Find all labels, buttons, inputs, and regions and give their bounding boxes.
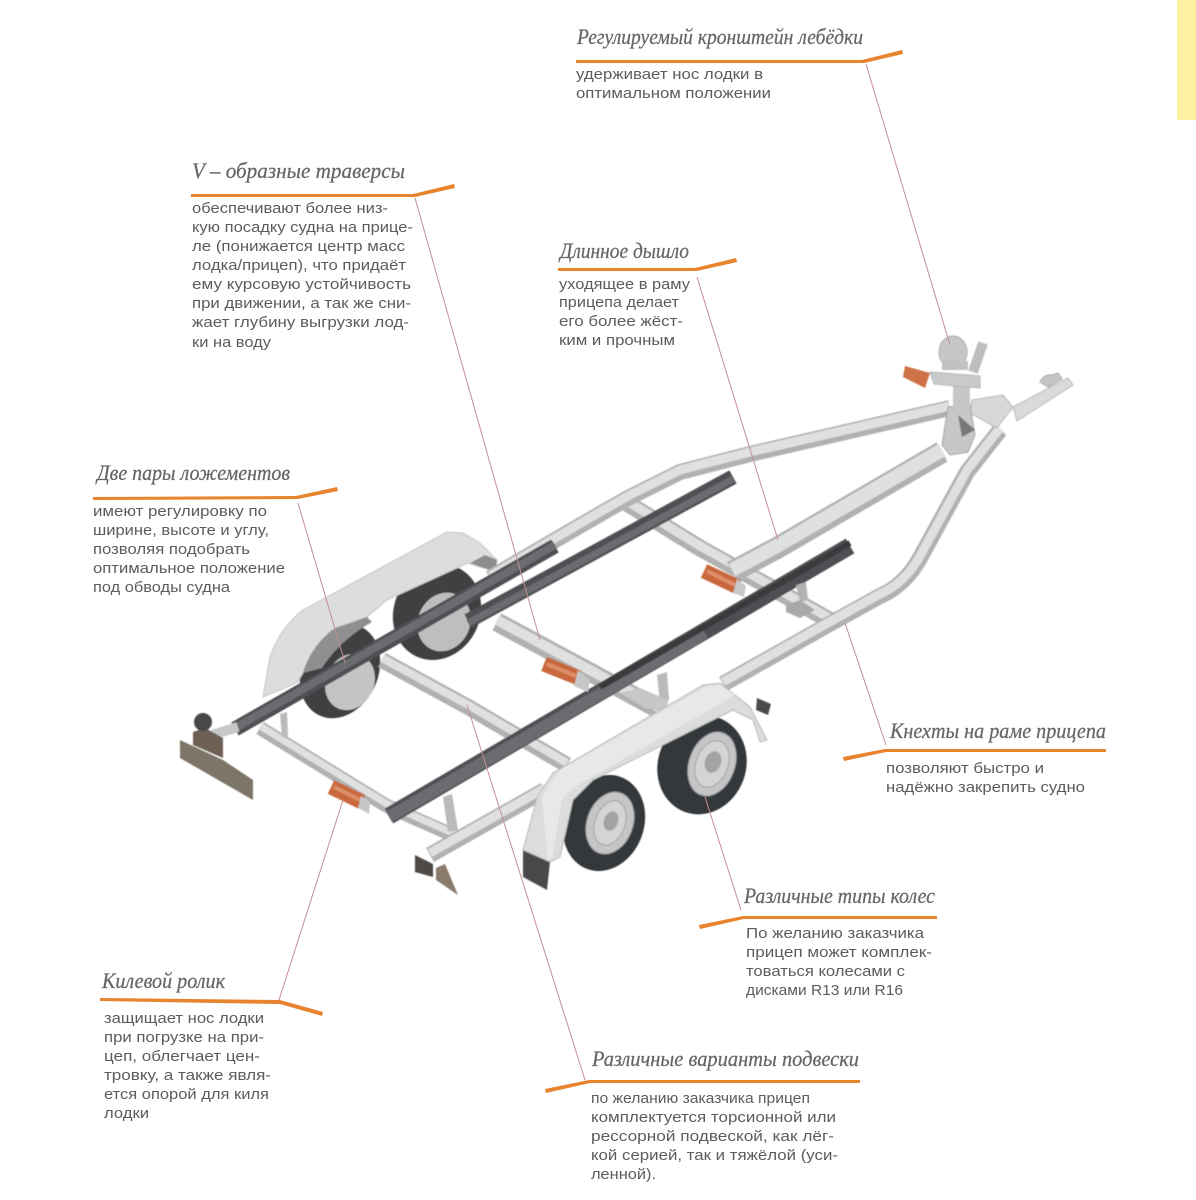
description: [591, 1090, 838, 1183]
orange underline: [93, 487, 338, 500]
heading: Различные типы колес: [743, 883, 935, 908]
description: дисками R13 или R16: [746, 982, 903, 999]
description: [192, 200, 413, 351]
left bunk: [235, 477, 733, 729]
heading: Различные варианты подвески: [591, 1046, 859, 1071]
leader line: bunks: [298, 503, 345, 663]
description: имеют регулировку по: [93, 503, 267, 520]
callout: winch bracket: [576, 24, 903, 102]
description: [93, 503, 285, 596]
lower frame rail: [430, 428, 1000, 855]
description: прицеп может комплек-: [746, 944, 932, 961]
rear guide plate left: [180, 713, 253, 800]
mudflap: [523, 850, 550, 890]
description: по желанию заказчика прицеп: [591, 1090, 810, 1107]
description: ленной).: [591, 1166, 656, 1183]
description: при движении, а так же сни-: [192, 295, 411, 312]
description: ки на воду: [192, 334, 272, 351]
description: По желанию заказчика: [746, 925, 925, 942]
description: уходящее в раму: [559, 276, 691, 293]
description: лодка/прицеп), что придаёт: [192, 257, 406, 274]
callout: cleats: [843, 718, 1106, 796]
orange underline: [843, 749, 1106, 761]
leader line: drawbar: [697, 277, 778, 540]
callout: two pairs of bunks: [93, 460, 338, 596]
winch with roller bracket: [903, 336, 983, 411]
frame cross beams: [260, 498, 833, 836]
leader line: cleats: [845, 623, 886, 745]
description: при погрузке на при-: [104, 1029, 264, 1046]
heading: Две пары ложементов: [95, 460, 290, 485]
description: обеспечивают более низ-: [192, 200, 388, 217]
description: [746, 925, 932, 999]
heading: Кнехты на раме прицепа: [889, 718, 1106, 743]
orange underline: [545, 1080, 860, 1093]
description: оптимальном положении: [576, 85, 771, 102]
description: [559, 276, 691, 349]
description: товаться колесами с: [746, 963, 906, 980]
yellow page tab: [1177, 0, 1196, 120]
description: ему курсовую устойчивость: [192, 276, 411, 293]
leader line: cross members: [415, 198, 540, 640]
rear guide plate right: [415, 855, 458, 895]
orange underline: [699, 916, 937, 929]
description: цеп, облегчает цен-: [104, 1048, 260, 1065]
description: прицепа делает: [559, 294, 679, 311]
orange underline: [576, 50, 903, 63]
description: комплектуется торсионной или: [591, 1109, 836, 1126]
description: кой серией, так и тяжёлой (уси-: [591, 1147, 838, 1164]
description: надёжно закрепить судно: [886, 779, 1085, 796]
description: позволяя подобрать: [93, 541, 250, 558]
description: лодки: [104, 1105, 149, 1122]
description: оптимальное положение: [93, 560, 285, 577]
description: кую посадку судна на прице-: [192, 219, 413, 236]
far wheels: [285, 549, 497, 731]
description: позволяют быстро и: [886, 760, 1044, 777]
leader line: wheels: [705, 797, 741, 910]
orange underline: [558, 258, 737, 271]
description: [886, 760, 1085, 796]
right bunk: [389, 543, 850, 817]
description: ким и прочным: [559, 332, 675, 349]
trailer illustration: [180, 336, 1073, 895]
callout: V-shaped cross members: [191, 158, 455, 351]
bunk supports: [280, 582, 815, 832]
description: ле (понижается центр масс: [192, 238, 406, 255]
orange underline: [100, 998, 323, 1016]
long central drawbar: [732, 444, 948, 572]
description: ется опорой для киля: [104, 1086, 269, 1103]
description: жает глубину выгрузки лод-: [192, 314, 409, 331]
description: рессорной подвеской, как лёг-: [591, 1128, 834, 1145]
orange underline: [191, 184, 455, 197]
description: [104, 1010, 271, 1122]
callout: suspension variants: [545, 1046, 860, 1183]
far fender: [263, 532, 497, 697]
callout: long drawbar: [558, 238, 737, 349]
heading: Килевой ролик: [101, 968, 226, 993]
leader line: suspension: [467, 705, 585, 1080]
callout: wheel types: [699, 883, 937, 999]
leader line: keel roller: [279, 800, 343, 1000]
description: его более жёст-: [559, 313, 683, 330]
hitch and coupler: [930, 373, 1073, 468]
leader line: winch bracket: [866, 64, 950, 345]
upper frame rail: [490, 406, 950, 578]
heading: Длинное дышло: [558, 238, 689, 263]
heading: Регулируемый кронштейн лебёдки: [576, 24, 863, 49]
near fender: [523, 683, 767, 862]
keel rollers: [331, 571, 746, 814]
light reflector: [756, 698, 771, 715]
description: [576, 66, 771, 102]
near wheels: [550, 703, 760, 883]
callout: keel roller: [100, 968, 323, 1122]
description: под обводы судна: [93, 579, 231, 596]
description: ширине, высоте и углу,: [93, 522, 269, 539]
description: защищает нос лодки: [104, 1010, 264, 1027]
description: удерживает нос лодки в: [576, 66, 763, 83]
description: тровку, а также явля-: [104, 1067, 271, 1084]
heading: V – образные траверсы: [192, 158, 405, 183]
